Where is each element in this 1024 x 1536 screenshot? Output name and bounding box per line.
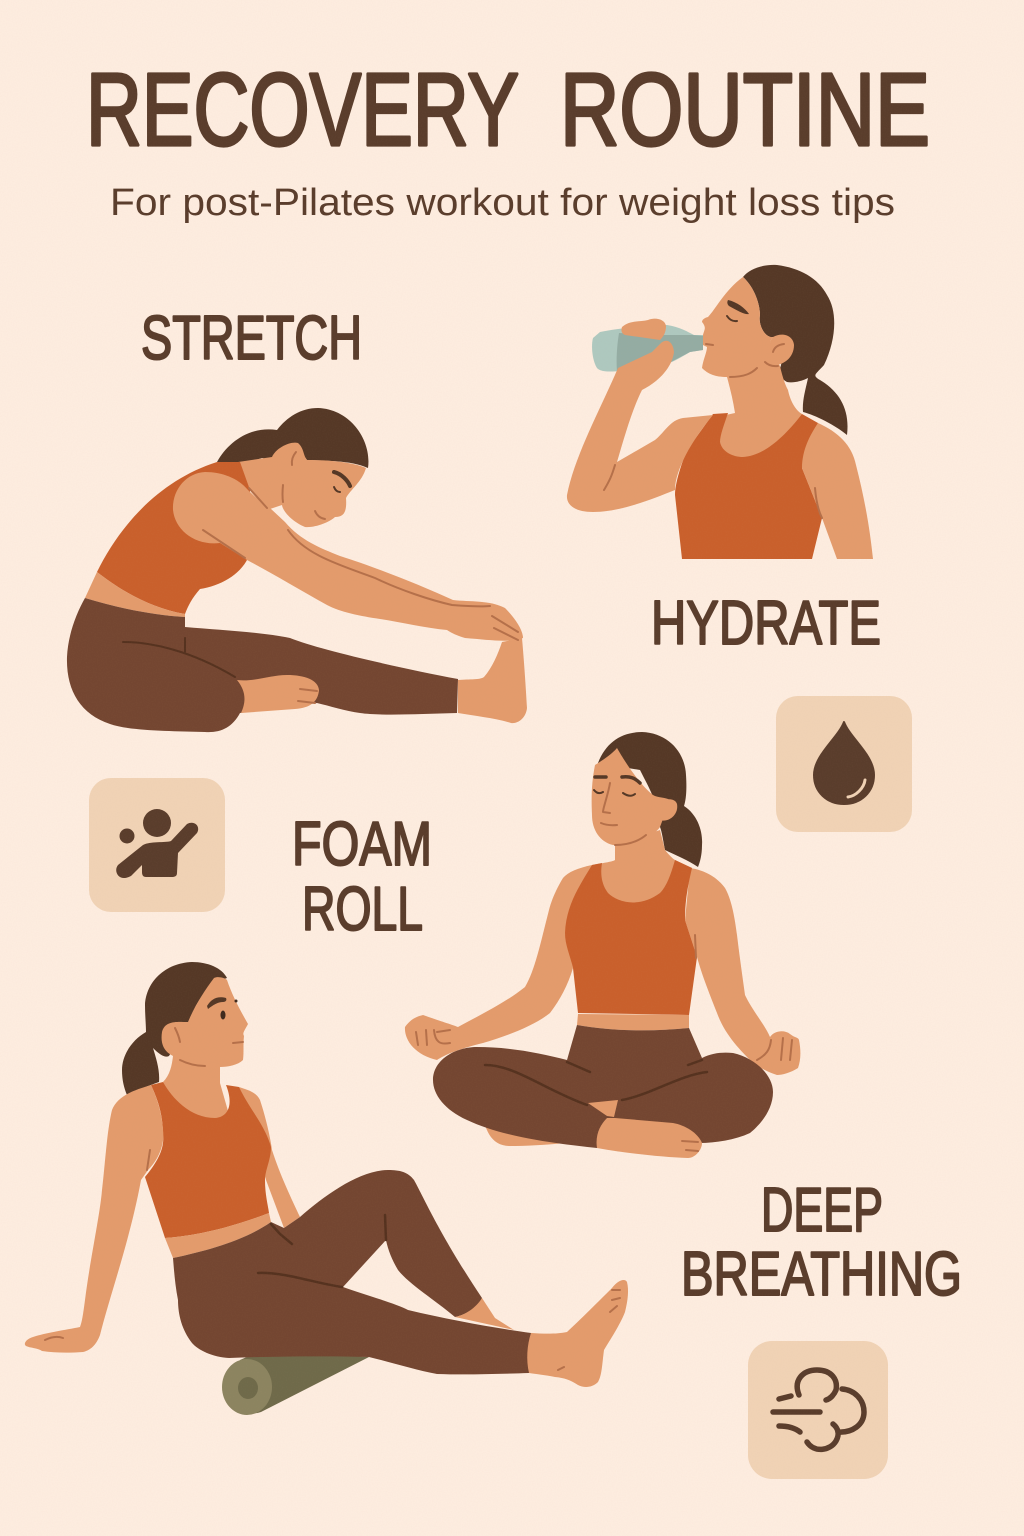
bottle [592,325,703,372]
ponytail and hair [217,408,368,468]
near arm and hand [25,1085,163,1353]
heading: foam roll [292,810,432,944]
ear detail [292,452,296,465]
far arm [239,1087,300,1228]
ear [769,335,794,366]
near arm and hand [567,341,713,512]
right arm [685,868,800,1075]
face details [334,472,350,486]
face and neck [162,977,248,1125]
crotch skin [588,1100,618,1117]
bottle water [617,333,703,372]
legging creases [258,1215,386,1287]
tank top [145,1082,271,1238]
under foot [485,1125,565,1146]
skin: neck and face [702,277,802,470]
midriff [165,1213,271,1258]
heading: deep breathing [681,1176,962,1309]
title [86,52,930,167]
ear [660,799,677,821]
hand fingers [621,319,666,340]
face details [207,997,226,1009]
neck and shoulders [592,830,692,915]
legging creases [123,638,235,677]
far hair and ponytail [598,732,702,867]
heading: foam roll: ROLL [302,875,423,944]
leggings [173,1170,531,1374]
heading: hydrate: HYDRATE [651,589,881,658]
face details [727,300,749,314]
foot [527,1280,628,1387]
hair and ponytail [122,962,227,1095]
left arm [405,865,592,1060]
heading: foam roll: FOAM [292,810,432,879]
limb creases [416,935,792,1060]
tank top [675,413,822,559]
front foot [597,1118,702,1158]
far shoulder and arm [802,423,873,559]
heading: stretch: STRETCH [141,304,362,373]
title: RECOVERY [86,52,519,167]
illustration: meditation [405,732,800,1158]
midriff [577,1014,689,1030]
icon: water drop [776,696,912,832]
midriff [85,572,185,617]
leggings [67,598,458,732]
illustration: seated forward stretch [67,408,527,732]
tank top [565,860,697,1015]
icon: stretch person [89,778,225,912]
icon: breath [748,1341,888,1479]
shin [455,1298,514,1330]
illustration: foam rolling [25,962,628,1415]
top [97,462,250,614]
foam roller [222,1352,369,1415]
heading: deep breathing: DEEP [761,1176,883,1245]
arm lines [203,488,490,606]
illustration: drinking water [567,265,873,559]
neck and head [238,443,366,527]
arm and hand [173,472,523,641]
subtitle: For post-Pilates workout for weight loss tips [110,182,895,224]
bent leg foot [237,675,319,713]
face details [595,777,640,783]
hair [743,265,848,435]
face [592,748,670,845]
leggings [433,1025,773,1148]
title: ROUTINE [560,52,930,167]
ear line [175,1028,205,1066]
extended foot [458,638,527,723]
